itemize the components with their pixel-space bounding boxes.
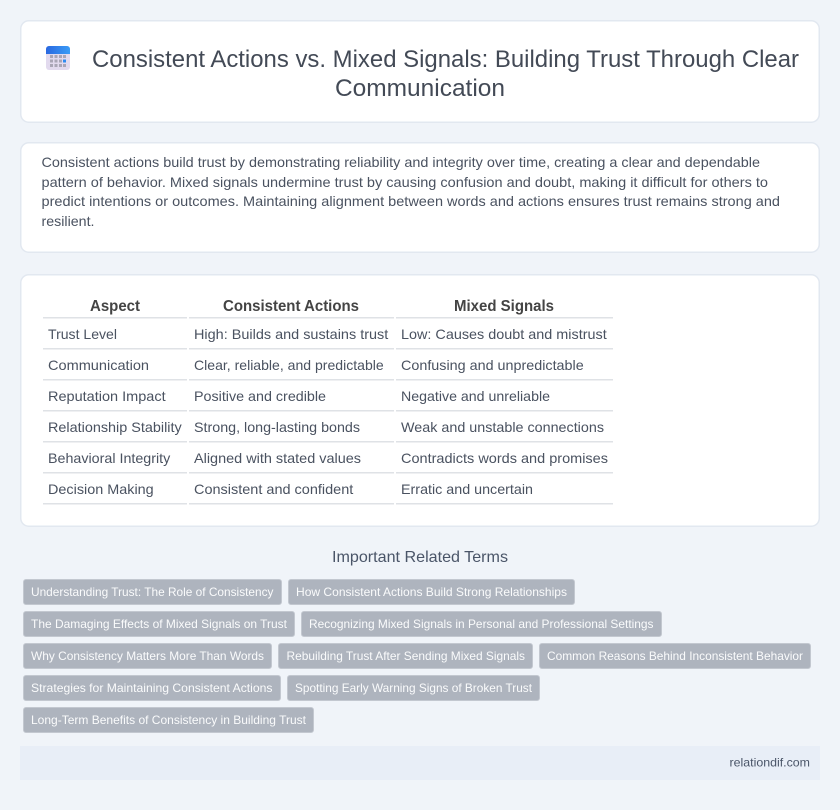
table row: relationship stability: Strong, long-lasting bonds xyxy=(194,419,360,435)
tag: Recognizing Mixed Signals in Personal and Professional Settings xyxy=(309,617,654,631)
text block: description: Consistent actions build trust by demonstrating reliability and integrity over time, creating a clear and dependable xyxy=(42,154,760,170)
tag: Long-Term Benefits of Consistency in Building Trust xyxy=(31,713,307,727)
table row: behavioral integrity: Behavioral Integrity xyxy=(48,450,170,466)
footer: relationdif.com xyxy=(730,756,810,770)
table row: decision making xyxy=(43,481,613,504)
heading: related terms: Important Related Terms xyxy=(332,549,508,566)
tag: How Consistent Actions Build Strong Relationships xyxy=(296,585,567,599)
footer xyxy=(20,746,820,780)
table row: reputation impact: Reputation Impact xyxy=(48,388,166,404)
table row: decision making: Decision Making xyxy=(48,481,154,497)
tag xyxy=(302,612,662,636)
text block: description: pattern of behavior. Mixed signals undermine trust by causing confusion and doubt, making it difficult for others to xyxy=(42,174,768,190)
tag xyxy=(288,580,574,604)
tag: Common Reasons Behind Inconsistent Behavior xyxy=(547,649,803,663)
table row: decision making: Consistent and confident xyxy=(194,481,353,497)
table row: relationship stability xyxy=(43,419,613,442)
panel: header xyxy=(21,21,819,122)
table row: behavioral integrity: Aligned with stated values xyxy=(194,450,361,466)
tag: Understanding Trust: The Role of Consistency xyxy=(31,585,274,599)
text block: description: predict intentions or outcomes. Maintaining alignment between words and actions ensures trust remains strong and xyxy=(42,193,780,209)
text block: description: resilient. xyxy=(42,213,94,229)
panel: comparison table xyxy=(21,275,819,526)
tag: Spotting Early Warning Signs of Broken Trust xyxy=(295,681,533,695)
table row: decision making: Erratic and uncertain xyxy=(401,481,533,497)
tag: The Damaging Effects of Mixed Signals on Trust xyxy=(31,617,288,631)
tag: Why Consistency Matters More Than Words xyxy=(31,649,264,663)
tag xyxy=(24,612,294,636)
tag xyxy=(24,708,314,732)
tag xyxy=(278,644,532,668)
table header row: Consistent Actions xyxy=(223,298,359,315)
icon: calendar xyxy=(46,46,70,70)
table row: communication: Confusing and unpredictable xyxy=(401,357,584,373)
table header row xyxy=(43,298,613,318)
table row: reputation impact: Positive and credible xyxy=(194,388,326,404)
tag xyxy=(24,580,282,604)
tag: Rebuilding Trust After Sending Mixed Signals xyxy=(286,649,525,663)
table row: reputation impact: Negative and unreliable xyxy=(401,388,550,404)
table row: trust level: Low: Causes doubt and mistrust xyxy=(401,326,607,342)
table row: behavioral integrity: Contradicts words and promises xyxy=(401,450,608,466)
tag xyxy=(540,644,810,668)
table row: reputation impact xyxy=(43,388,613,412)
table row: communication: Communication xyxy=(48,357,149,373)
table header row: Mixed Signals xyxy=(454,298,554,315)
table row: communication: Clear, reliable, and predictable xyxy=(194,357,384,373)
panel: description xyxy=(21,143,819,252)
tag xyxy=(288,676,540,700)
table row: communication xyxy=(43,357,613,380)
table row: trust level: High: Builds and sustains trust xyxy=(194,326,388,342)
tag group: related terms xyxy=(24,580,810,732)
tag xyxy=(24,676,280,700)
table row: behavioral integrity xyxy=(43,450,613,474)
title: Consistent Actions vs. Mixed Signals: Building Trust Through Clear xyxy=(92,46,799,73)
table row: trust level: Trust Level xyxy=(48,326,117,342)
table row: relationship stability: Weak and unstable connections xyxy=(401,419,604,435)
tag: Strategies for Maintaining Consistent Actions xyxy=(31,681,272,695)
table header row: Aspect xyxy=(90,298,141,315)
table row: relationship stability: Relationship Stability xyxy=(48,419,182,435)
tag xyxy=(24,644,272,668)
table row: trust level xyxy=(43,326,613,350)
title: Communication xyxy=(335,75,505,102)
